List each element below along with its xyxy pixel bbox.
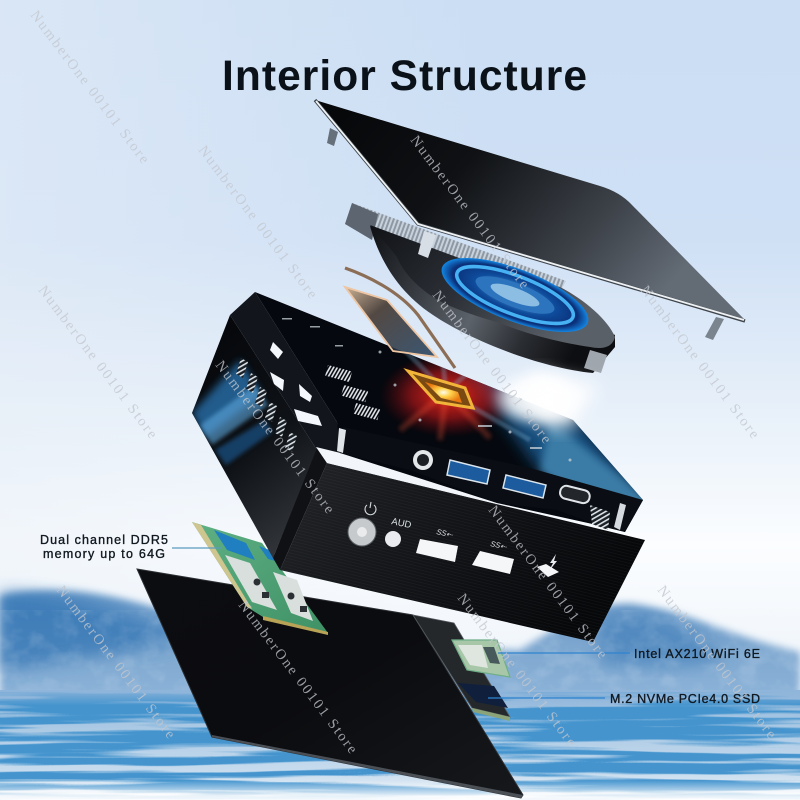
front panel: [280, 463, 645, 642]
fan assembly with heatsink: [345, 203, 615, 373]
front panel controls: [348, 502, 559, 577]
callout: memory: memory up to 64G: [43, 547, 165, 561]
fan side wall: [370, 226, 615, 373]
RAM brand stripes: [214, 530, 255, 560]
power button: [348, 518, 376, 546]
vent grilles: [236, 358, 297, 452]
USB-C port: [559, 485, 591, 504]
heatsink fins: [345, 203, 566, 300]
fan top face: [370, 225, 615, 348]
WiFi card: [452, 640, 510, 677]
component dashes: [325, 365, 380, 420]
thunderbolt icon: [549, 554, 557, 571]
copper heat pipes: [345, 268, 455, 368]
store watermarks: NumberOne 00101 Store: [212, 358, 337, 517]
chassis cut-outs: [270, 342, 283, 359]
RAM labels: [225, 555, 277, 610]
store watermarks: NumberOne 00101 Store: [654, 583, 779, 742]
SS label one: SS⇠: [436, 527, 454, 539]
store watermarks: NumberOne 00101 Store: [454, 591, 579, 750]
light rays: [404, 354, 531, 442]
AUD jack: [385, 531, 401, 547]
store watermarks: NumberOne 00101 Store: [235, 598, 360, 757]
store watermarks: NumberOne 00101 Store: [27, 8, 152, 167]
board corner post: [337, 428, 346, 453]
store watermarks: NumberOne 00101 Store: [485, 503, 610, 662]
USB port two: [472, 551, 514, 574]
audio jack: [413, 450, 433, 470]
inner chassis wall: [230, 292, 343, 455]
USB A ports: [447, 460, 490, 484]
title: Interior Structure: [222, 53, 587, 100]
left face: [192, 315, 317, 558]
blue fan ring: [433, 243, 597, 347]
glow under fan: [490, 368, 600, 430]
SS label two: SS⇠: [490, 539, 508, 551]
CPU chip: [408, 371, 473, 408]
rear ports: [413, 450, 610, 530]
mini PC box: [192, 292, 645, 642]
callout: WiFi: Intel AX210 WiFi 6E: [634, 647, 760, 661]
store watermarks: NumberOne 00101 Store: [53, 583, 178, 742]
store watermarks: NumberOne 00101 Store: [195, 143, 320, 302]
bottom cover plate: [137, 569, 523, 798]
plate posts: [327, 128, 338, 146]
fan screw post: [584, 350, 607, 373]
callout: SSD: M.2 NVMe PCIe4.0 SSD: [610, 692, 760, 706]
right side post: [614, 503, 626, 530]
AUD label: AUD: [390, 516, 412, 531]
store watermarks: NumberOne 00101 Store: [35, 283, 160, 442]
USB port one: [416, 539, 458, 562]
power icon: [365, 502, 376, 515]
callout: memory: [40, 533, 222, 561]
thunderbolt port: [537, 564, 559, 577]
store watermarks: NumberOne 00101 Store: [407, 133, 532, 292]
M.2 SSD and WiFi card: [413, 615, 510, 721]
right vents: [590, 505, 610, 530]
store watermarks: NumberOne 00101 Store: [637, 283, 762, 442]
top cover plate: [315, 100, 745, 340]
silver front edge: [315, 100, 745, 321]
store watermarks: NumberOne 00101 Store: [429, 288, 554, 447]
motherboard: [255, 292, 650, 532]
callout: memory: Dual channel DDR5: [40, 533, 168, 547]
RAM modules: [192, 522, 328, 635]
board front edge: [340, 427, 643, 532]
white lip above panel: [316, 447, 497, 504]
